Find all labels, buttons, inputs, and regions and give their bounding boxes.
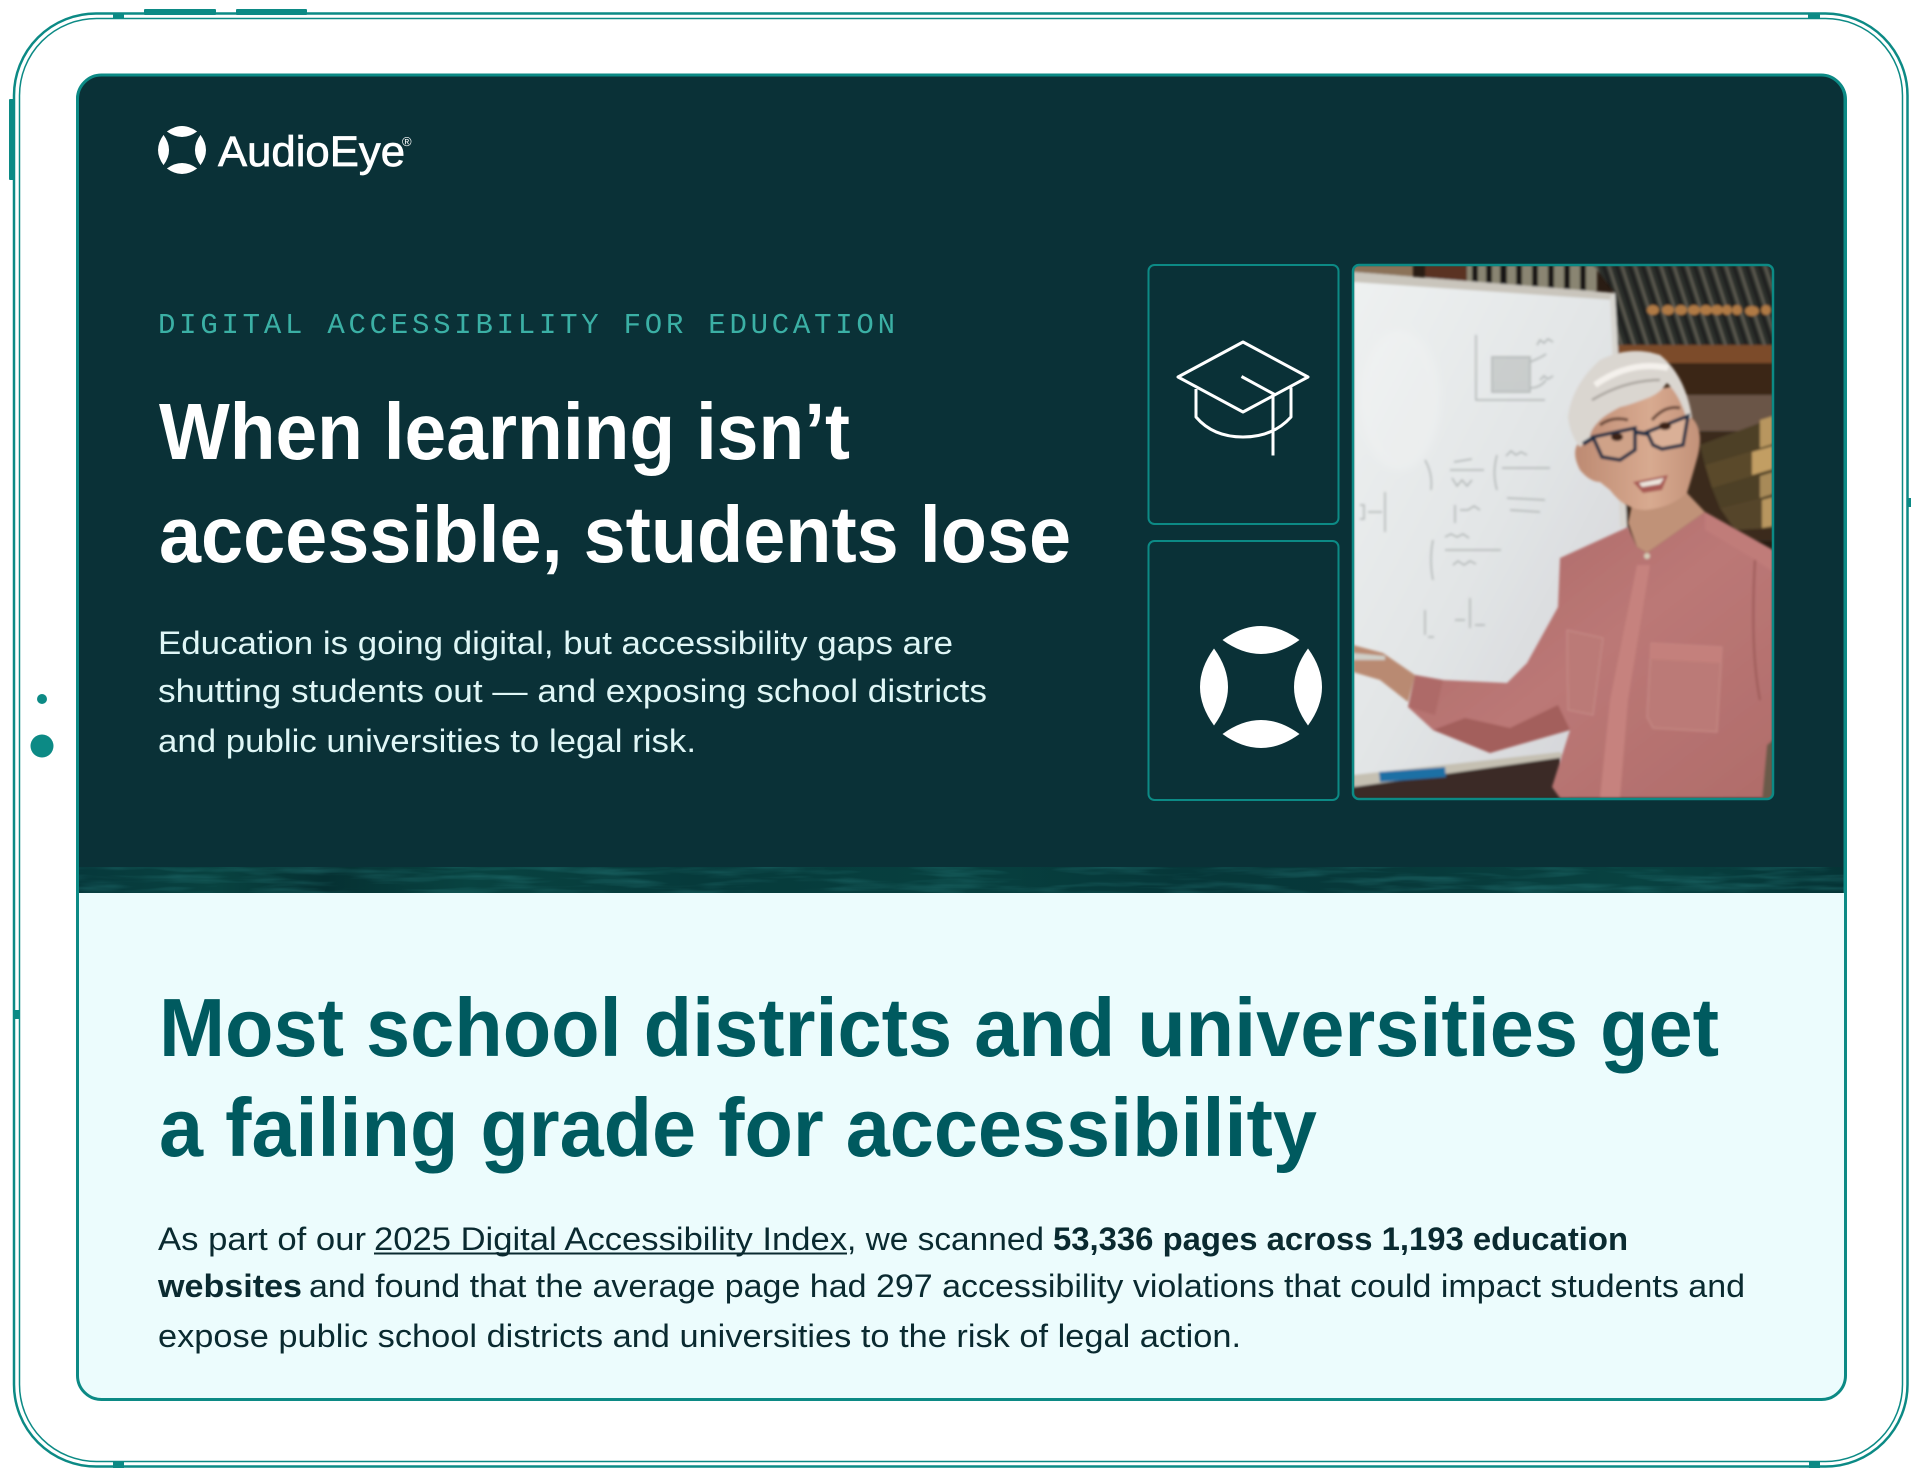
- title: accessible, students lose: [159, 490, 1071, 579]
- intro paragraph: [158, 625, 987, 759]
- body text: 2025 Digital Accessibility Index: [374, 1221, 847, 1257]
- icon: large logo mark: [1200, 626, 1322, 748]
- intro paragraph: shutting students out — and exposing school districts: [158, 673, 987, 709]
- section heading: a failing grade for accessibility: [159, 1081, 1317, 1174]
- body text: [157, 1221, 1745, 1354]
- body text: , we scanned: [847, 1221, 1044, 1257]
- hero border: [78, 75, 1845, 893]
- panel: logo mark card: [1148, 541, 1338, 800]
- intro paragraph: Education is going digital, but accessibility gaps are: [158, 625, 953, 661]
- title: When learning isn’t: [159, 387, 850, 476]
- eyebrow: DIGITAL ACCESSIBILITY FOR EDUCATION: [158, 309, 895, 342]
- wordmark: AudioEye: [218, 128, 405, 176]
- photo: teacher at whiteboard: [1353, 265, 1773, 800]
- body text: expose public school districts and universities to the risk of legal action.: [158, 1318, 1241, 1354]
- photo frame: [1353, 265, 1773, 799]
- title: [159, 387, 1071, 579]
- panel: graduation cap card: [1148, 265, 1338, 524]
- section heading: Most school districts and universities get: [159, 981, 1719, 1074]
- body text: websites: [157, 1268, 302, 1304]
- body text: As part of our: [158, 1221, 366, 1257]
- body text: 53,336 pages across 1,193 education: [1053, 1221, 1628, 1257]
- body text: and found that the average page had 297 accessibility violations that could impact students and: [309, 1268, 1745, 1304]
- icon: logo mark: [158, 126, 206, 174]
- registered mark: ®: [402, 134, 412, 149]
- whiteboard scribbles: [1360, 335, 1553, 637]
- intro paragraph: and public universities to legal risk.: [158, 723, 696, 759]
- textured strip: [78, 867, 1846, 893]
- teacher figure: [1353, 351, 1773, 800]
- icon: graduation cap: [1178, 342, 1308, 456]
- logo: AudioEye: [158, 126, 412, 176]
- section heading: [159, 981, 1719, 1174]
- panel: dark hero: [78, 75, 1846, 893]
